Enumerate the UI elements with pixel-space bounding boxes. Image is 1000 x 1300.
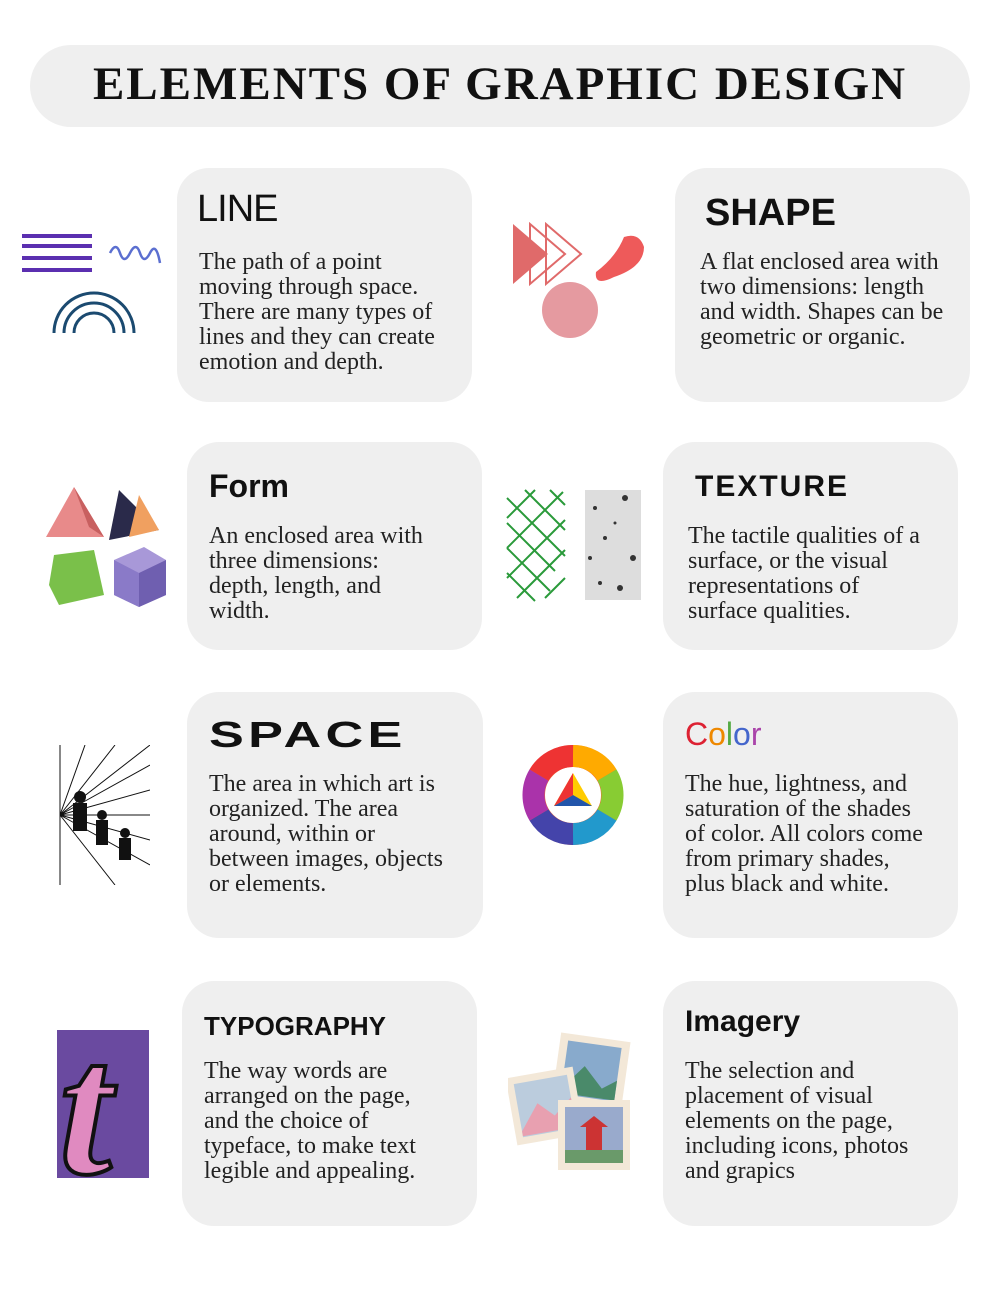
text: space: or elements. — [209, 871, 326, 897]
heading: texture: TEXTURE — [695, 470, 849, 503]
text: typography: legible and appealing. — [204, 1158, 415, 1184]
text: color: of color. All colors come — [685, 821, 923, 847]
text: space: organized. The area — [209, 796, 398, 822]
icon: color wheel — [522, 745, 624, 845]
text: color: saturation of the shades — [685, 796, 911, 822]
text: line: moving through space. — [199, 274, 418, 300]
text: texture — [688, 523, 920, 624]
panel: line — [177, 168, 472, 402]
heading: color: Color — [685, 716, 761, 752]
text: color: from primary shades, — [685, 846, 890, 872]
text: line: There are many types of — [199, 299, 432, 325]
icon: lines — [22, 234, 162, 333]
text: imagery: including icons, photos — [685, 1133, 908, 1159]
text: shape — [700, 249, 943, 350]
text: typography: and the choice of — [204, 1108, 369, 1134]
icon: space perspective — [60, 745, 150, 885]
text: imagery: The selection and — [685, 1058, 854, 1084]
heading: imagery: Imagery — [685, 1005, 800, 1038]
heading: form: Form — [209, 468, 289, 504]
panel: typography — [182, 981, 477, 1226]
text: shape: A flat enclosed area with — [700, 249, 939, 275]
text: imagery — [685, 1058, 908, 1184]
text: imagery: placement of visual — [685, 1083, 873, 1109]
text: texture: surface, or the visual — [688, 548, 888, 574]
text: form: three dimensions: — [209, 548, 379, 574]
text: space: between images, objects — [209, 846, 443, 872]
text: form — [209, 523, 423, 624]
text: texture: surface qualities. — [688, 598, 851, 624]
panel: texture — [663, 442, 958, 650]
title — [30, 45, 970, 127]
text: typography: typeface, to make text — [204, 1133, 416, 1159]
icon: shapes — [513, 222, 644, 338]
heading: space: SPACE — [209, 714, 407, 755]
text: shape: geometric or organic. — [700, 324, 905, 350]
text: typography — [204, 1058, 416, 1184]
text: shape: two dimensions: length — [700, 274, 924, 300]
text: imagery: elements on the page, — [685, 1108, 893, 1134]
panel: shape — [675, 168, 970, 402]
icon: photos — [508, 1032, 630, 1170]
panel: color — [663, 692, 958, 938]
text: form: An enclosed area with — [209, 523, 423, 549]
text: space — [209, 771, 443, 897]
text: form: width. — [209, 598, 270, 624]
text: color: The hue, lightness, and — [685, 771, 907, 797]
icon: texture — [506, 489, 641, 602]
icon: letter t — [57, 1028, 149, 1180]
title: ELEMENTS OF GRAPHIC DESIGN — [93, 58, 907, 110]
text: texture: representations of — [688, 573, 859, 599]
heading: line: LINE — [197, 188, 277, 230]
text: line — [199, 249, 435, 375]
text: typography: The way words are — [204, 1058, 387, 1084]
text: typography: arranged on the page, — [204, 1083, 411, 1109]
text: texture: The tactile qualities of a — [688, 523, 920, 549]
text: line: emotion and depth. — [199, 349, 384, 375]
panel: space — [187, 692, 483, 938]
heading: typography: TYPOGRAPHY — [204, 1011, 386, 1041]
text: color — [685, 771, 923, 897]
panel: form — [187, 442, 482, 650]
text: line: The path of a point — [199, 249, 382, 275]
panel: imagery — [663, 981, 958, 1226]
text: color: plus black and white. — [685, 871, 889, 897]
text: space: around, within or — [209, 821, 375, 847]
text: imagery: and grapics — [685, 1158, 795, 1184]
text: line: lines and they can create — [199, 324, 435, 350]
text: form: depth, length, and — [209, 573, 381, 599]
heading: shape: SHAPE — [705, 192, 836, 234]
icon: 3d forms — [46, 487, 166, 607]
text: shape: and width. Shapes can be — [700, 299, 943, 325]
text: space: The area in which art is — [209, 771, 435, 797]
